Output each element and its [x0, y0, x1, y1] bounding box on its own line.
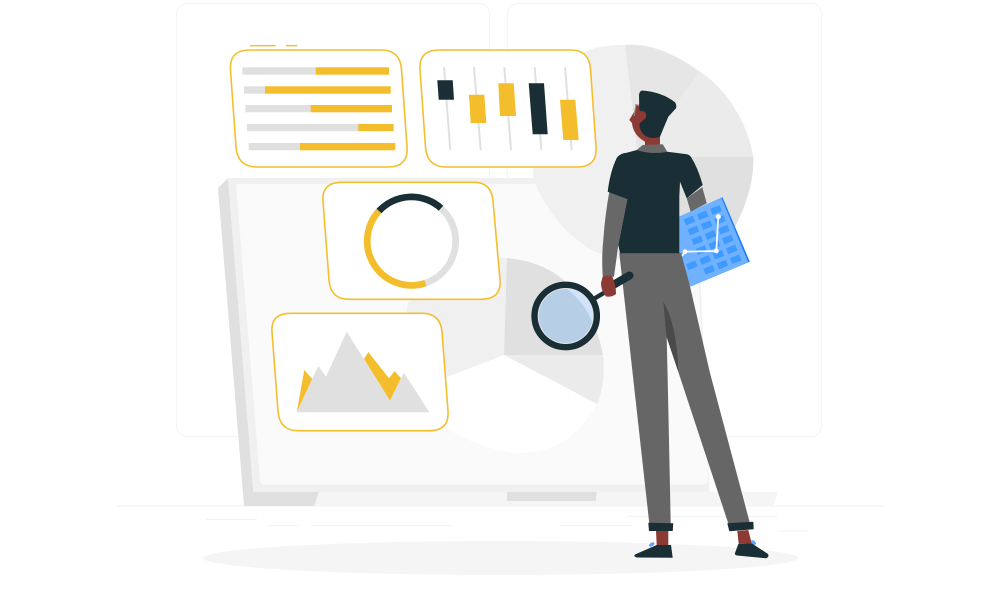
- card outline: [230, 50, 407, 167]
- lens ring: [538, 288, 594, 344]
- hair: [639, 90, 676, 138]
- magnifying glass: [535, 276, 630, 347]
- donut segments: [367, 197, 456, 285]
- tablet edge: [679, 197, 750, 286]
- small pie slice: bottom: [435, 355, 597, 453]
- collar: [637, 144, 667, 155]
- yellow peaks: [297, 352, 401, 412]
- small pie slice: lower right: [504, 355, 604, 404]
- pie slice: left: [533, 45, 672, 261]
- card: candlestick chart: [420, 50, 596, 167]
- card outline: [420, 50, 596, 167]
- small pie chart: [407, 258, 604, 453]
- monitor base: [244, 492, 778, 506]
- small header dashes: [250, 45, 297, 47]
- pie slice: top: [625, 45, 700, 157]
- monitor screen: [236, 184, 708, 484]
- card outline: [272, 313, 448, 431]
- card outline: [323, 182, 500, 299]
- card: horizontal bars: [230, 50, 407, 167]
- shoe laces: [648, 539, 757, 548]
- small pie slice: upper right: [504, 258, 603, 355]
- monitor: [218, 178, 778, 506]
- magnifier rim: [535, 285, 597, 347]
- gray peaks: [297, 332, 429, 412]
- shirt: [608, 150, 703, 253]
- monitor side and stand: [218, 178, 319, 506]
- hand: [601, 276, 616, 297]
- candle wicks: [444, 67, 572, 150]
- floor shadow: [203, 541, 798, 575]
- arm behind body: [687, 187, 707, 212]
- trouser shadow: [663, 302, 678, 372]
- shoes: [634, 543, 768, 558]
- tablet line chart: [682, 214, 721, 256]
- tablet with line chart: [670, 197, 750, 286]
- magnifier handle: [608, 276, 630, 288]
- small pie slice: upper left: [407, 258, 507, 377]
- lens highlight: [567, 289, 593, 322]
- background panels: [176, 4, 822, 436]
- monitor frame: [228, 178, 710, 492]
- lens: [539, 289, 593, 343]
- candle bodies: [437, 80, 579, 140]
- person: [535, 90, 768, 558]
- trouser cuffs: [648, 522, 754, 531]
- socks: [656, 530, 752, 545]
- monitor stand foot: [507, 492, 597, 501]
- pie slice: lower right: [638, 157, 753, 257]
- pie slice: upper right: [638, 72, 753, 157]
- bar tracks: [242, 67, 359, 150]
- card: mountain area chart: [272, 313, 448, 431]
- glasses: [634, 104, 640, 116]
- ground lines: [117, 506, 885, 531]
- neck and face: [629, 103, 660, 148]
- tablet cells: [670, 205, 742, 280]
- tablet surface: [679, 198, 748, 286]
- large pie chart: [533, 45, 753, 261]
- left arm: [602, 192, 627, 277]
- card: donut chart: [323, 182, 500, 299]
- trousers: [619, 253, 750, 524]
- bar values: [265, 67, 395, 150]
- magnifier neck: [592, 288, 612, 300]
